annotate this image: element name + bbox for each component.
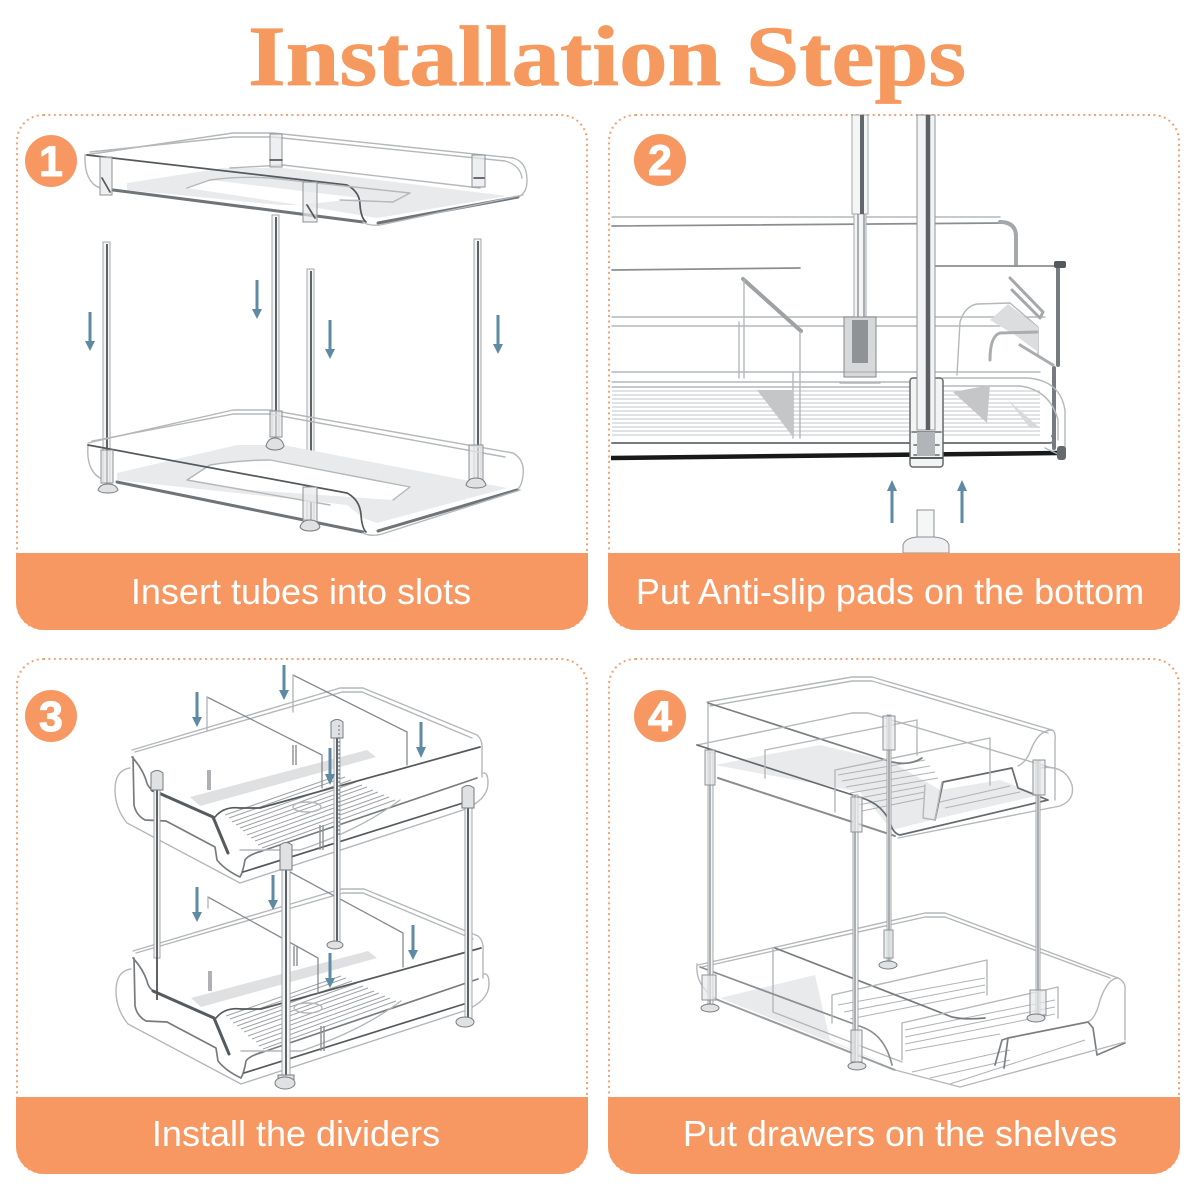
caption band: step 4: Put drawers on the shelves <box>683 1113 1117 1154</box>
illustration: posts <box>151 720 474 1089</box>
panel: step 1 <box>16 115 588 630</box>
badge: number 3 <box>25 690 77 742</box>
arrows: step 2 <box>887 480 967 523</box>
badge: number 2: 2 <box>648 137 672 185</box>
arrows: step 1 <box>85 280 503 359</box>
panel: step 4 <box>608 659 1180 1174</box>
title: Installation Steps <box>248 8 966 104</box>
illustration: bottom shelf <box>88 410 523 535</box>
badge: number 4 <box>634 690 686 742</box>
illustration: lower drawer <box>697 913 1125 1087</box>
illustration: dividers lower <box>208 872 403 993</box>
badge: number 3: 3 <box>39 693 63 741</box>
panel: step 2 <box>608 115 1180 630</box>
illustration: upper tier <box>115 688 488 883</box>
panel: step 3 <box>16 659 588 1174</box>
badge: number 1 <box>25 135 77 187</box>
illustration: lower tier <box>116 889 489 1084</box>
arrows: step 3 <box>192 665 426 988</box>
caption band: step 2 <box>608 553 1180 630</box>
caption band: step 3 <box>16 1097 588 1174</box>
illustration: dividers upper <box>207 675 407 788</box>
badge: number 1: 1 <box>39 138 63 186</box>
illustration: posts <box>701 715 1046 1070</box>
badge: number 2 <box>634 134 686 186</box>
caption band: step 4 <box>608 1097 1180 1174</box>
illustration: top shelf <box>85 133 527 225</box>
badge: number 4: 4 <box>648 693 672 741</box>
caption band: step 2: Put Anti-slip pads on the bottom <box>636 571 1144 612</box>
caption band: step 1: Insert tubes into slots <box>131 571 471 612</box>
illustration: tray close-up <box>611 217 1066 460</box>
illustration: upper drawer <box>697 677 1072 838</box>
illustration: posts <box>840 115 943 467</box>
illustration: anti-slip pad <box>903 510 949 553</box>
caption band: step 3: Install the dividers <box>152 1113 440 1154</box>
illustration: tubes <box>103 215 481 523</box>
caption band: step 1 <box>16 553 588 630</box>
